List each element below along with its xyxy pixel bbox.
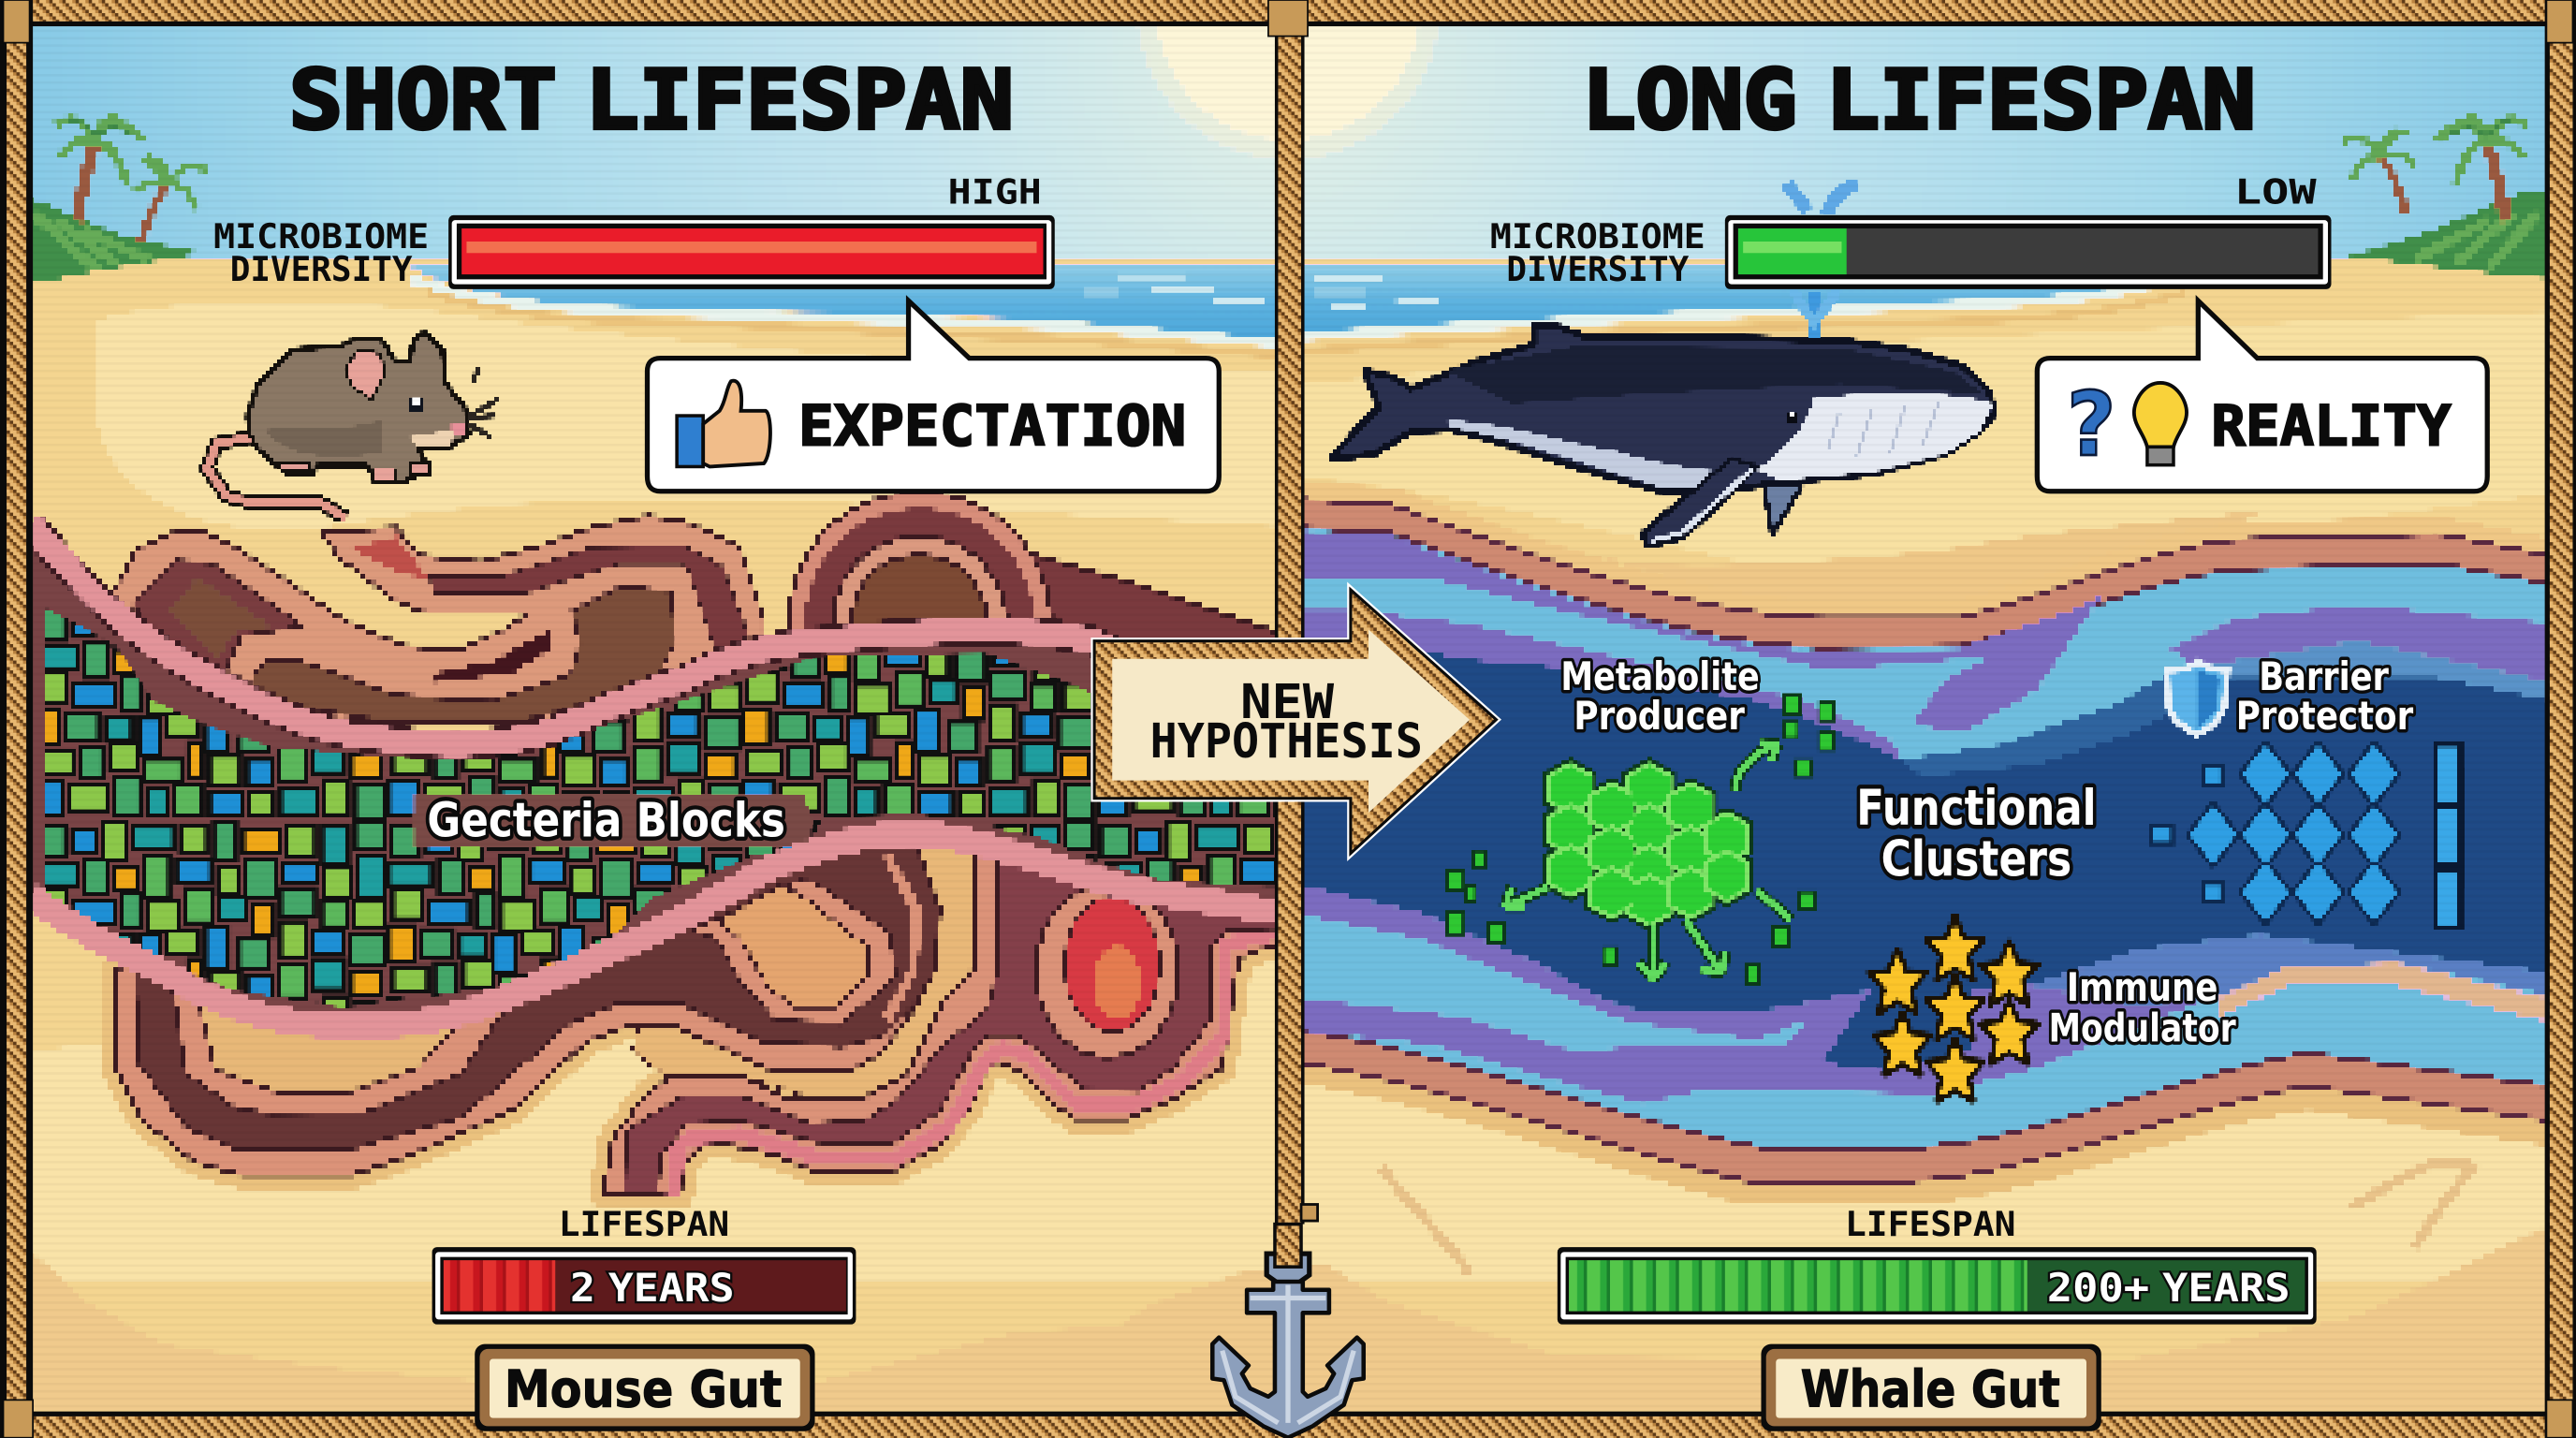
icon: whale spout xyxy=(1788,184,1856,342)
icon: question mark: ? xyxy=(2067,374,2116,477)
speech bubble: expectation: EXPECTATION xyxy=(798,395,1186,460)
right lifespan bar: 200+ YEARS xyxy=(2047,1265,2291,1311)
left lifespan bar xyxy=(432,1247,856,1325)
icon: thumbs up xyxy=(677,381,770,466)
diagram: barrier protector diamonds xyxy=(2152,742,2463,929)
label: functional clusters: Clusters xyxy=(1881,830,2071,888)
illustration: mouse gut folds xyxy=(30,516,1278,1195)
label: metabolite producer xyxy=(1560,653,1760,739)
inflamed red oval xyxy=(1033,882,1181,1060)
label: metabolite producer: Metabolite xyxy=(1560,653,1760,699)
icon: anchor with rope knot xyxy=(1212,1204,1364,1438)
right lifespan label: LIFESPAN xyxy=(1845,1204,2016,1244)
left microbiome diversity label: MICROBIOME xyxy=(213,216,429,257)
label: functional clusters: Functional xyxy=(1856,780,2097,837)
label: barrier protector: Barrier xyxy=(2259,653,2389,699)
left diversity level: high: HIGH xyxy=(948,172,1042,213)
lower left lobe and middle body xyxy=(115,846,940,1175)
speech bubble: expectation xyxy=(648,301,1219,492)
label: immune modulator: Modulator xyxy=(2049,1005,2236,1051)
plaque: mouse gut: Mouse Gut xyxy=(505,1359,782,1418)
left lifespan bar: 2 YEARS xyxy=(570,1265,735,1311)
sand shadow around gut xyxy=(115,846,1278,1195)
left microbiome diversity label: DIVERSITY xyxy=(230,249,413,289)
mouse gut lumen xyxy=(30,522,1278,1026)
title: short lifespan: SHORT LIFESPAN xyxy=(289,52,1014,148)
arrow: new hypothesis: HYPOTHESIS xyxy=(1150,714,1423,770)
diagram: immune modulator stars xyxy=(1869,917,2037,1101)
upper left fold xyxy=(111,516,764,723)
left diversity bar xyxy=(448,215,1055,289)
label: metabolite producer: Producer xyxy=(1573,693,1745,739)
right diversity bar xyxy=(1725,215,2331,289)
lower tan strip xyxy=(633,846,974,1099)
label: barrier protector: Protector xyxy=(2236,693,2413,739)
bacteria blocks xyxy=(44,608,1278,1007)
plaque: whale gut xyxy=(1761,1344,2101,1431)
speech bubble: reality xyxy=(2037,301,2487,492)
speech bubble: reality: REALITY xyxy=(2211,395,2452,460)
icon: left island with palm trees xyxy=(30,118,207,283)
right microbiome diversity label xyxy=(1490,216,1705,289)
icon: whale xyxy=(1332,326,1995,546)
right diversity level: low: LOW xyxy=(2234,172,2318,213)
right lifespan bar xyxy=(1558,1247,2317,1325)
arrow: new hypothesis: NEW xyxy=(1240,675,1335,730)
label: gecteria blocks: Gecteria Blocks xyxy=(427,793,785,848)
right microbiome diversity label: DIVERSITY xyxy=(1506,249,1690,289)
plaque: whale gut: Whale Gut xyxy=(1801,1359,2060,1418)
icon: mouse xyxy=(207,333,498,518)
lower right body and tail xyxy=(603,846,1278,1195)
right microbiome diversity label: MICROBIOME xyxy=(1490,216,1705,257)
diagram: metabolite producer hex cluster xyxy=(1447,697,1834,983)
illustration: whale gut bands xyxy=(1301,493,2550,1193)
label: immune modulator: Immune xyxy=(2067,964,2217,1010)
upper right fold xyxy=(851,550,1278,723)
label: immune modulator xyxy=(2049,964,2236,1051)
label: functional clusters xyxy=(1856,780,2097,888)
title: long lifespan: LONG LIFESPAN xyxy=(1582,52,2256,148)
gut wall bands xyxy=(30,522,1278,1026)
left microbiome diversity label xyxy=(213,216,429,289)
label: barrier protector xyxy=(2236,653,2413,739)
plaque: mouse gut xyxy=(475,1344,815,1431)
arrow: new hypothesis xyxy=(1104,611,1482,831)
icon: right island with palm trees xyxy=(2341,118,2550,279)
icon: light bulb xyxy=(2134,383,2187,465)
left lifespan label: LIFESPAN xyxy=(559,1204,729,1244)
icon: shield xyxy=(2167,659,2228,735)
